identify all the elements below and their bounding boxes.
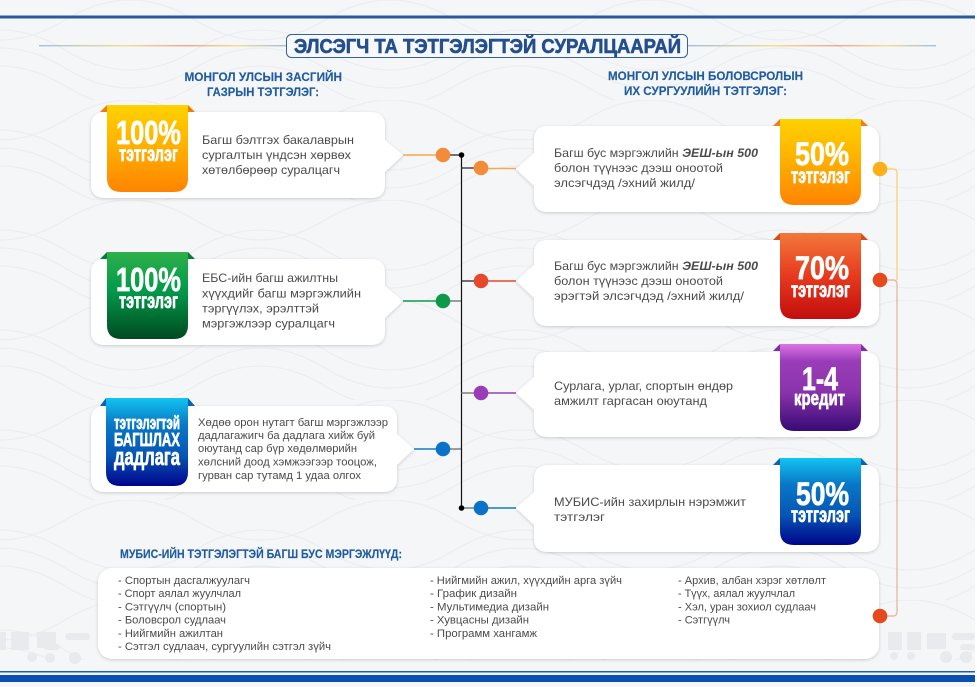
ribbon badge: teaching practice: тэтгэлэгтэй [114, 413, 180, 433]
connector nodes [436, 148, 887, 623]
ribbon badge: teaching practice [100, 398, 195, 486]
description [198, 417, 388, 482]
ribbon badge: teaching practice: БАГШЛАХ [114, 430, 180, 450]
description: хөтөлбөрөөр суралцагч [202, 163, 340, 177]
description: амжилт гаргасан оюутанд [554, 394, 707, 408]
list column 1: - Спорт аялал жуулчлал [118, 588, 241, 600]
description: Хөдөө орон нутагт багш мэргэжлээр [198, 417, 388, 429]
ribbon badge: 50% [773, 119, 868, 205]
ribbon badge: 100% green: 100% [116, 261, 181, 298]
heading: government scholarships: МОНГОЛ УЛСЫН ЗАСГИЙН [184, 69, 342, 84]
description [202, 271, 361, 330]
decorative corner icons: right [888, 632, 975, 663]
description: Багш бэлтгэх бакалаврын [202, 133, 354, 147]
description: болон түүнээс дээш оноотой [554, 274, 723, 288]
list column 1: - Боловсрол судлаач [118, 614, 226, 626]
list column 3: - Архив, албан хэрэг хөтлөлт [678, 575, 826, 587]
description: хөлсний доод хэмжээгээр тооцож, [198, 456, 377, 468]
list column 3: - Хэл, уран зохиол судлаач [678, 602, 816, 614]
ribbon badge: 100% green [100, 252, 195, 339]
ribbon badge: 50%: тэтгэлэг [791, 165, 850, 188]
panel: 50% non-teaching, orange [516, 119, 879, 212]
panel: 1-4 credits, purple [516, 344, 879, 437]
top border line [0, 16, 975, 18]
list column 1 [118, 575, 331, 653]
heading: university scholarships [608, 69, 803, 98]
description: мэргэжлээр суралцагч [202, 316, 335, 330]
list column 2: - Программ хангамж [430, 628, 538, 640]
description [554, 495, 747, 524]
description [554, 379, 733, 408]
ribbon badge: 70%: 70% [795, 250, 849, 286]
description [202, 133, 354, 177]
description: Багш бус мэргэжлийн ЭЕШ-ын 500 [554, 146, 758, 160]
description: гурван сар тутамд 1 удаа олгох [198, 470, 362, 482]
ribbon badge: 50%: 50% [795, 136, 849, 172]
description: дадлагажигч ба дадлага хийж буй [198, 430, 375, 442]
heading: government scholarships [184, 69, 342, 99]
heading: university scholarships: ИХ СУРГУУЛИЙН ТЭТГЭЛЭГ: [624, 83, 787, 98]
ribbon badge: 70%: тэтгэлэг [791, 279, 850, 302]
ribbon badge: 1-4 credits: 1-4 [802, 361, 838, 397]
decorative corner icons: left [0, 632, 90, 664]
list column 3 [678, 575, 826, 626]
description: ЕБС-ийн багш ажилтны [202, 271, 338, 285]
bottom border [0, 671, 975, 682]
panel: 70% non-teaching, red [516, 233, 879, 326]
description: Багш бус мэргэжлийн ЭЕШ-ын 500 [554, 259, 758, 273]
description [554, 146, 758, 190]
right side connector [880, 169, 897, 616]
title [39, 34, 936, 58]
list column 1: - Сэтгүүлч (спортын) [118, 602, 226, 614]
ribbon badge: teaching practice: дадлага [114, 444, 180, 471]
title: ЭЛСЭГЧ ТА ТЭТГЭЛЭГТЭЙ СУРАЛЦААРАЙ [294, 34, 681, 58]
description: элсэгчдэд /эхний жилд/ [554, 176, 696, 190]
description: Сурлага, урлаг, спортын өндөр [554, 379, 733, 393]
ribbon badge: 50% blue [773, 458, 868, 545]
heading: university scholarships: МОНГОЛ УЛСЫН БОЛОВСРОЛЫН [608, 69, 803, 83]
list column 1: - Нийгмийн ажилтан [118, 628, 223, 640]
list column 2: - Мультимедиа дизайн [430, 602, 549, 614]
description: тэтгэлэг [554, 510, 606, 524]
list column 2: - Хувцасны дизайн [430, 614, 529, 626]
description: тэргүүлэх, эрэлттэй [202, 302, 319, 316]
panel: 100% scholarship, orange [91, 105, 403, 198]
list column 1: - Спортын дасгалжуулагч [118, 575, 250, 587]
description: оюутанд сар бүр хөдөлмөрийн [198, 443, 357, 455]
ribbon badge: 70% [773, 233, 868, 319]
ribbon badge: 50% blue: 50% [796, 476, 849, 512]
ribbon badge: 1-4 credits [773, 344, 868, 431]
heading: non-teaching majors: МУБИС-ИЙН ТЭТГЭЛЭГТЭЙ БАГШ БУС МЭРГЭЖЛҮҮД: [120, 548, 402, 561]
heading: government scholarships: ГАЗРЫН ТЭТГЭЛЭГ: [207, 85, 319, 99]
panel: 50% rector's scholarship, blue [516, 458, 879, 552]
description: сургалтын үндсэн хөрвөх [202, 148, 351, 162]
panel: teaching practice scholarship [91, 398, 414, 492]
ribbon badge: 100% [100, 105, 195, 192]
list column 3: - Түүх, аялал жуулчлал [678, 588, 795, 600]
list column 1: - Сэтгэл судлаач, сургуулийн сэтгэл зүйч [118, 641, 331, 653]
description: хүүхдийг багш мэргэжлийн [202, 286, 361, 300]
description [554, 259, 758, 303]
list column 2: - Нийгмийн ажил, хүүхдийн арга зүйч [430, 575, 622, 587]
list column 2: - График дизайн [430, 588, 517, 600]
panel: 100% scholarship, green [91, 252, 403, 345]
ribbon badge: 100% green: тэтгэлэг [119, 290, 178, 313]
panel: list of majors [98, 568, 879, 659]
ribbon badge: 100%: тэтгэлэг [119, 143, 178, 166]
ribbon badge: 50% blue: тэтгэлэг [791, 504, 850, 527]
description: болон түүнээс дээш оноотой [554, 161, 723, 175]
description: МУБИС-ийн захирлын нэрэмжит [554, 495, 747, 509]
connector network [403, 152, 516, 511]
list column 2 [430, 575, 622, 640]
ribbon badge: 100%: 100% [116, 114, 181, 151]
list column 3: - Сэтгүүлч [678, 614, 730, 626]
description: эрэгтэй элсэгчдэд /эхний жилд/ [554, 289, 745, 303]
ribbon badge: 1-4 credits: кредит [794, 388, 845, 410]
